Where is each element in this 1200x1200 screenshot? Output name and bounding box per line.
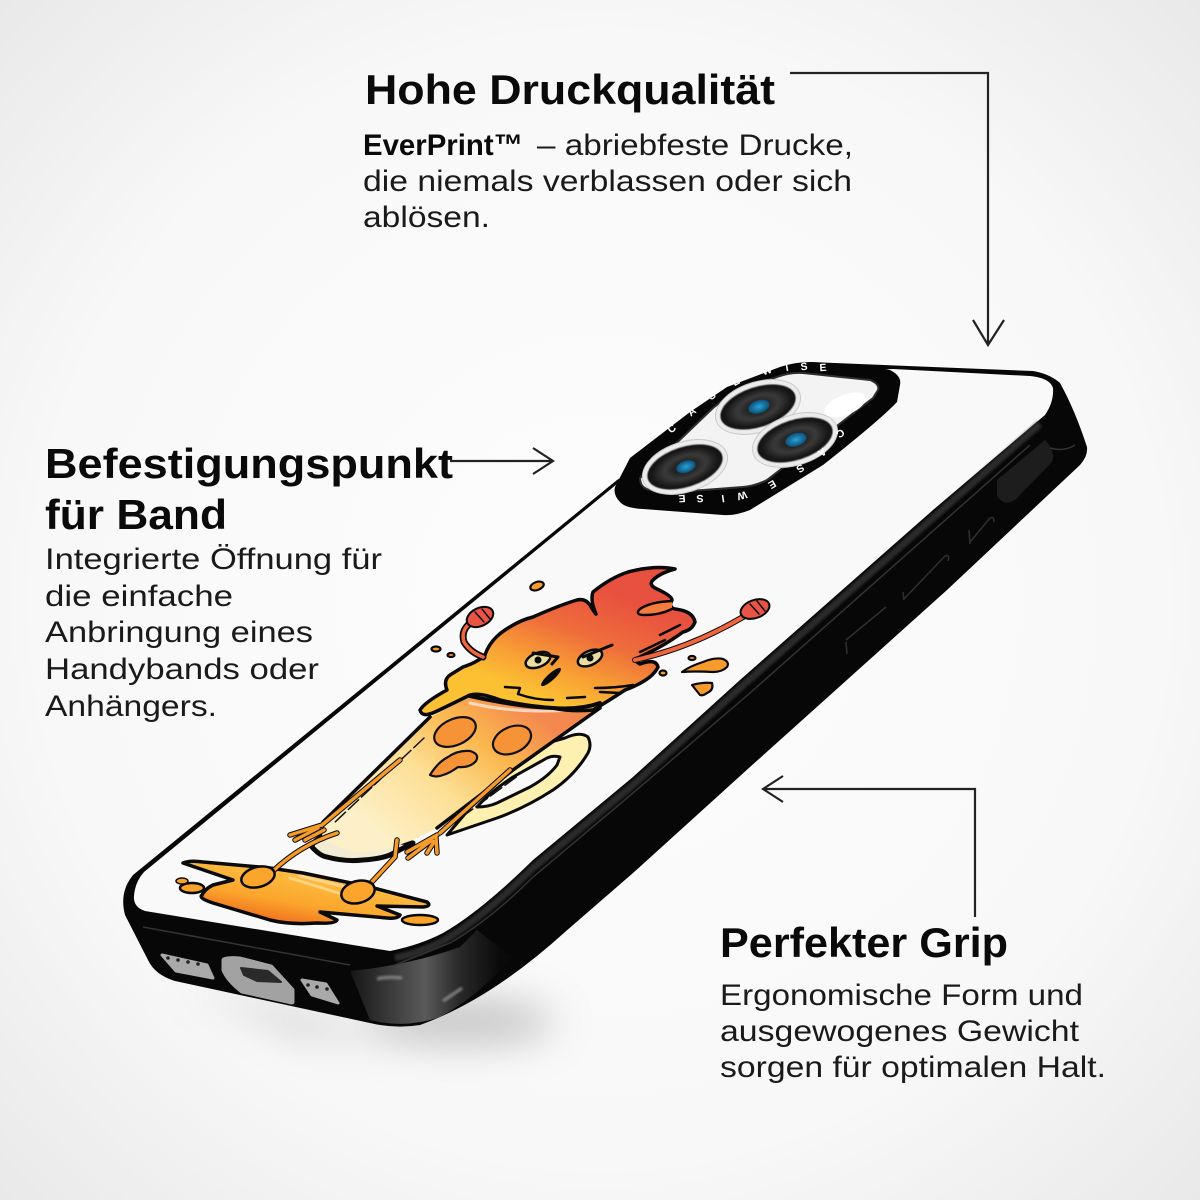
casewise bump lettering: S: [800, 361, 808, 373]
glossy bottom corner: [350, 930, 512, 1024]
phone shadow: [180, 985, 555, 1046]
casewise bump lettering: S: [706, 389, 718, 403]
face edge highlight: [395, 424, 1040, 958]
casewise bump lettering: I: [785, 362, 790, 374]
illustration: flaming beer mug character: [176, 568, 772, 925]
heading: grip: Perfekter Grip: [720, 919, 1008, 966]
casewise bump lettering: E: [678, 492, 686, 504]
puddle: [176, 861, 438, 925]
charging and speaker ports: [162, 955, 338, 1003]
body: grip: [720, 979, 1106, 1084]
casewise bump lettering: W: [760, 364, 774, 378]
body: grip: ausgewogenes Gewicht: [720, 1015, 1080, 1048]
phone case: [123, 361, 1087, 1027]
lenses: [635, 370, 845, 504]
casewise bump lettering: S: [696, 492, 704, 504]
case body: [123, 362, 1087, 1027]
casewise bump lettering: C: [833, 426, 847, 440]
body: print quality: die niemals verblassen oder sich: [363, 165, 852, 198]
phone back face: [134, 369, 1053, 951]
casewise bump lettering: [665, 361, 847, 504]
body: print quality: ablösen.: [363, 201, 490, 234]
heading: print quality: Hohe Druckqualität: [365, 66, 775, 113]
casewise bump lettering: E: [730, 375, 742, 389]
callout: grip: [720, 919, 1106, 1084]
arms fists and legs: [239, 595, 772, 907]
body: strap attachment: Anbringung eines: [45, 616, 313, 649]
body: print quality: EverPrint™: [363, 129, 523, 162]
handle: [447, 734, 590, 835]
casewise bump lettering: A: [815, 445, 829, 459]
face: [523, 645, 612, 688]
body: grip: Ergonomische Form und: [720, 979, 1083, 1012]
lens window: [640, 373, 878, 492]
heading: strap attachment: Befestigungspunkt: [45, 440, 453, 487]
casewise bump lettering: I: [721, 492, 725, 504]
mug body: [312, 697, 600, 861]
casewise bump lettering: A: [685, 405, 699, 419]
body: strap attachment: Anhängers.: [45, 690, 217, 723]
foam flame: [420, 568, 695, 715]
casewise bump lettering: E: [819, 362, 827, 374]
body: grip: sorgen für optimalen Halt.: [720, 1051, 1106, 1084]
arrow: print quality to case: [790, 73, 1004, 345]
strap slot: [997, 440, 1053, 503]
body: strap attachment: die einfache: [45, 580, 233, 613]
camera bump: [615, 361, 900, 515]
body: strap attachment: Handybands oder: [45, 653, 319, 686]
arrow: strap attachment: [450, 448, 553, 474]
heading: strap attachment: für Band: [45, 491, 227, 538]
droplets: [432, 580, 728, 695]
body: print quality: – abriebfeste Drucke,: [537, 129, 853, 162]
heading: strap attachment: [45, 440, 453, 538]
body: strap attachment: [45, 543, 382, 723]
casewise bump lettering: E: [766, 477, 778, 491]
body: strap attachment: Integrierte Öffnung für: [45, 543, 382, 576]
callout: print quality: [363, 66, 853, 234]
side buttons: [846, 518, 994, 654]
mug spots: [430, 711, 536, 776]
casewise bump lettering: S: [794, 461, 806, 475]
casewise bump lettering: C: [665, 422, 679, 436]
body: print quality: [363, 129, 853, 234]
callout: strap attachment: [45, 440, 453, 723]
casewise bump lettering: W: [736, 488, 748, 502]
arrow: grip: [763, 776, 975, 917]
